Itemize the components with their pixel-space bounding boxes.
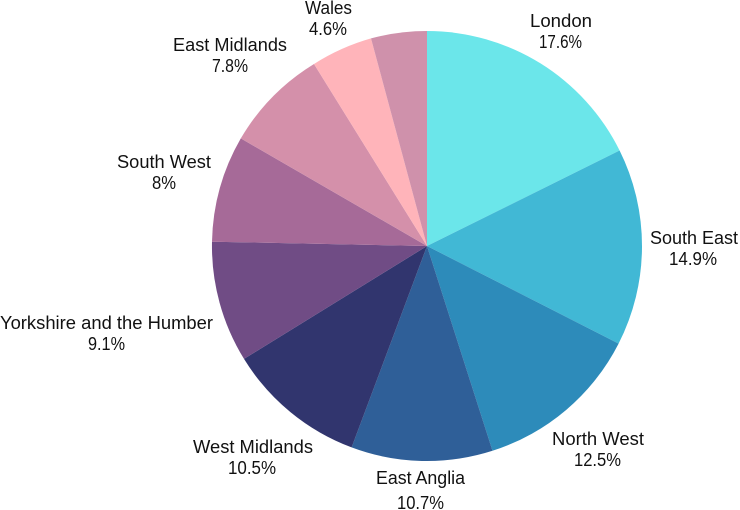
label: Yorkshire and the Humber: Yorkshire and the Humber: [0, 313, 213, 333]
label: South West: [117, 152, 211, 193]
label: East Anglia: [376, 468, 466, 510]
label: North West: [552, 429, 644, 470]
label: East Midlands: 7.8%: [212, 56, 248, 76]
label: East Midlands: East Midlands: [173, 35, 287, 55]
slice: South East: [427, 150, 642, 344]
label: South West: 8%: [152, 173, 176, 193]
label: East Midlands: [173, 35, 287, 76]
slice: South West: [212, 138, 427, 246]
label: South East: 14.9%: [669, 249, 717, 269]
label: South West: South West: [117, 152, 211, 172]
slice: North West: [427, 246, 619, 451]
label: London: 17.6%: [539, 32, 582, 52]
slice: Yorkshire and the Humber: [212, 242, 427, 359]
label: London: London: [530, 11, 592, 31]
label: London: [530, 11, 592, 52]
label: South East: [650, 228, 738, 269]
label: South East: South East: [650, 228, 738, 248]
slice: East Midlands: [241, 64, 427, 246]
label: West Midlands: [193, 437, 313, 478]
label: Wales: [305, 0, 352, 39]
slice: Wales: [314, 38, 427, 246]
slice: West Midlands: [244, 246, 427, 447]
slice: East Anglia: [352, 246, 492, 461]
label: North West: North West: [552, 429, 644, 449]
label: West Midlands: 10.5%: [228, 458, 276, 478]
label: West Midlands: West Midlands: [193, 437, 313, 457]
label: Yorkshire and the Humber: 9.1%: [88, 334, 125, 354]
label: Wales: 4.6%: [309, 19, 347, 39]
label: Yorkshire and the Humber: [0, 313, 213, 354]
label: East Anglia: East Anglia: [376, 468, 466, 488]
slice: unlabelled remainder: [371, 31, 427, 246]
slice: London: [427, 31, 620, 246]
pie slices: [212, 31, 642, 461]
label: North West: 12.5%: [574, 450, 621, 470]
